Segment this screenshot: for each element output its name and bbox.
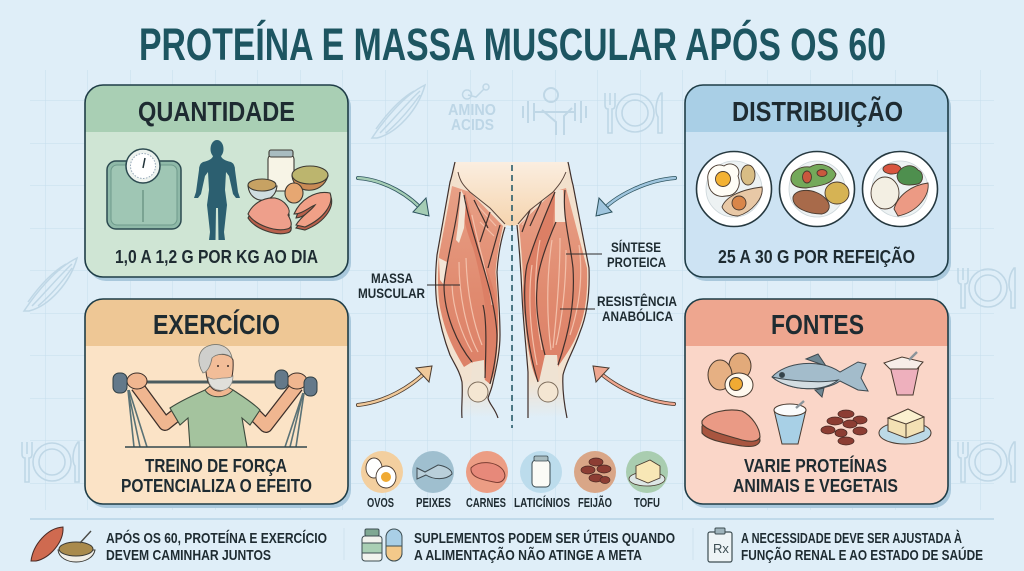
label: resistência anabólica — [597, 294, 677, 324]
icon: breakfast plate — [696, 152, 772, 226]
faint background icons: ACIDS — [451, 117, 494, 134]
text: exercício: POTENCIALIZA O EFEITO — [121, 476, 312, 496]
label: massa muscular — [358, 271, 425, 301]
pelvis — [455, 162, 568, 226]
food: tofu — [626, 451, 668, 510]
text: exercício: TREINO DE FORÇA — [145, 456, 287, 476]
note: kidney function — [708, 528, 983, 564]
heading: fontes: FONTES — [771, 309, 864, 340]
icon: steak and salad plate — [780, 152, 854, 226]
food: carnes — [466, 451, 508, 510]
icon: protein foods — [248, 150, 332, 234]
food: feijão — [574, 451, 616, 510]
icon: muscle and bowl — [31, 527, 95, 562]
arrow: distribuição to muscle — [596, 178, 675, 216]
text: distribuição: 25 A 30 G POR REFEIÇÃO — [718, 246, 915, 267]
text: fontes — [733, 455, 898, 496]
panel: quantidade — [85, 85, 351, 281]
label: síntese proteica — [607, 240, 666, 270]
bottom strip — [30, 519, 994, 564]
icon: scale — [107, 149, 181, 229]
food: carnes: CARNES — [466, 495, 506, 510]
arrow: exercício to muscle — [358, 366, 432, 405]
note: protein and exercise — [31, 527, 327, 564]
icon: supplements — [362, 529, 402, 561]
faint background icons: AMINO — [448, 102, 496, 119]
food: ovos: OVOS — [367, 495, 394, 510]
icon: yogurt — [884, 352, 923, 395]
arrow: fontes to muscle — [593, 366, 674, 404]
food: tofu: TOFU — [634, 495, 660, 510]
food: peixes — [412, 451, 454, 510]
icon: tofu — [879, 409, 931, 444]
icon: milk cup — [774, 401, 806, 444]
icon: eggs — [708, 353, 753, 397]
note: protein and exercise: DEVEM CAMINHAR JUNTOS — [106, 547, 271, 564]
label: síntese proteica: SÍNTESE — [611, 240, 661, 255]
panel: fontes — [685, 299, 951, 508]
food: peixes: PEIXES — [416, 495, 451, 510]
label: massa muscular: MUSCULAR — [358, 286, 425, 301]
food row — [361, 451, 668, 510]
label: resistência anabólica: RESISTÊNCIA — [597, 294, 677, 309]
heading: quantidade: QUANTIDADE — [138, 96, 295, 127]
note: supplements: A ALIMENTAÇÃO NÃO ATINGE A META — [414, 546, 642, 564]
left leg — [436, 162, 512, 418]
text: quantidade: 1,0 A 1,2 G POR KG AO DIA — [115, 247, 318, 267]
faint background icons — [22, 84, 1015, 482]
icon: prescription clipboard — [708, 528, 732, 562]
panel: distribuição — [685, 85, 951, 281]
right leg — [512, 162, 589, 418]
label: massa muscular: MASSA — [371, 271, 413, 286]
note: supplements: SUPLEMENTOS PODEM SER ÚTEIS QUANDO — [414, 529, 675, 547]
icon: fish — [772, 354, 868, 397]
note: protein and exercise: APÓS OS 60, PROTEÍNA E EXERCÍCIO — [106, 529, 327, 547]
arrow: quantidade to muscle — [358, 178, 429, 216]
note: supplements — [362, 529, 675, 564]
panel: exercício — [85, 299, 351, 508]
illustration: older man with dumbbells — [113, 344, 317, 447]
food: feijão: FEIJÃO — [578, 495, 612, 510]
text: fontes: ANIMAIS E VEGETAIS — [733, 476, 898, 496]
icon: beans — [821, 410, 867, 445]
heading: distribuição: DISTRIBUIÇÃO — [732, 96, 903, 127]
icon: salmon and rice plate — [862, 152, 938, 226]
icon: meat — [702, 410, 760, 446]
text: fontes: VARIE PROTEÍNAS — [744, 455, 887, 476]
label: resistência anabólica: ANABÓLICA — [602, 309, 673, 324]
icon: prescription clipboard: Rx — [713, 541, 729, 556]
food: laticínios — [514, 451, 570, 510]
text: exercício — [121, 456, 312, 496]
food: laticínios: LATICÍNIOS — [514, 495, 570, 510]
icon: body silhouette — [194, 140, 240, 240]
food: ovos — [361, 451, 403, 510]
heading: exercício: EXERCÍCIO — [153, 309, 280, 340]
label: síntese proteica: PROTEICA — [607, 255, 666, 270]
anatomy: thigh muscles — [427, 162, 602, 428]
